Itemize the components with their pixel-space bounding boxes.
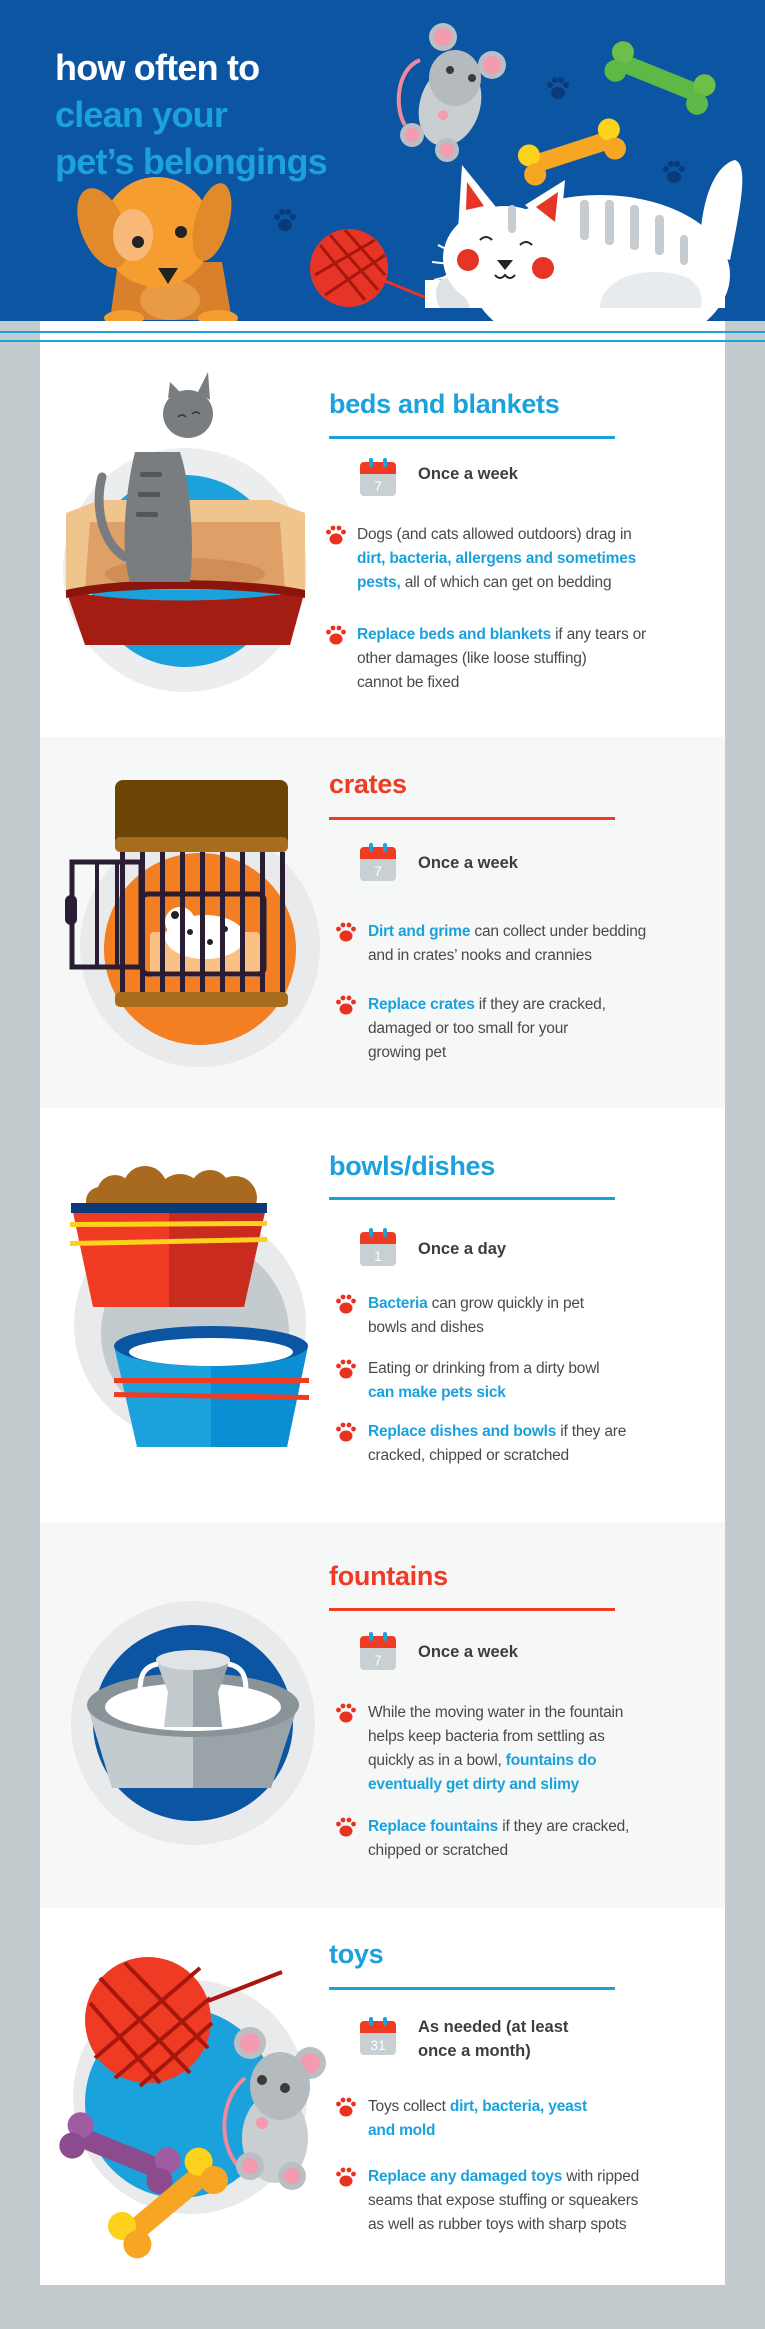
icon: paw prints — [274, 77, 685, 231]
icon: calendar 1 — [360, 1228, 396, 1266]
bullet: replace crates: growing pet — [368, 1044, 446, 1061]
bullet: bacteria — [336, 1294, 584, 1336]
illustration: fountain — [71, 1601, 315, 1845]
frequency text — [418, 2018, 568, 2060]
bullet: dirt — [326, 526, 636, 591]
panel: crates — [40, 737, 725, 1108]
frequency text: Once a week — [418, 1643, 518, 1661]
frequency text: Once a week — [418, 465, 518, 483]
bullet: replace fountains: Replace fountains if they are cracked, — [368, 1818, 629, 1835]
bullet: replace toys: seams that expose stuffing or squeakers — [368, 2192, 638, 2209]
bullet: moving water: While the moving water in the fountain — [368, 1704, 623, 1721]
bullet: replace fountains: chipped or scratched — [368, 1842, 508, 1859]
bullet: replace: other damages (like loose stuffing) — [357, 650, 587, 667]
bullet: replace bowls — [336, 1422, 626, 1464]
bullet: bacteria: Bacteria can grow quickly in pet — [368, 1295, 584, 1312]
bullet: replace crates — [336, 996, 606, 1061]
title: pet’s belongings — [55, 141, 327, 182]
bullet: toys collect: Toys collect dirt, bacteria, yeast — [368, 2098, 587, 2115]
bullet: replace toys: as well as rubber toys with sharp spots — [368, 2216, 626, 2233]
bullet: replace toys — [336, 2168, 639, 2233]
bullet: replace bowls: cracked, chipped or scratched — [368, 1447, 569, 1464]
bullet: replace crates: damaged or too small for your — [368, 1020, 568, 1037]
illustration: crate with dalmatian — [65, 780, 320, 1067]
icon: toy mouse — [399, 23, 506, 162]
heading: crates: crates — [329, 769, 407, 799]
frequency text: Once a day — [418, 1240, 506, 1258]
frequency text: Once a week — [418, 854, 518, 872]
bullet: dirty bowl — [336, 1360, 599, 1401]
icon: calendar 7: 7 — [374, 478, 382, 494]
bullet: moving water — [336, 1704, 623, 1793]
header banner — [0, 0, 765, 321]
icon: calendar 7 — [360, 458, 396, 496]
icon: yellow bone — [515, 116, 629, 188]
panel: beds and blankets — [40, 342, 725, 737]
bullet: dirty bowl: can make pets sick — [368, 1384, 506, 1401]
icon: yarn ball — [310, 229, 432, 307]
bullet: dirt: pests, all of which can get on bedding — [357, 574, 611, 591]
illustration: bowls — [70, 1166, 309, 1447]
bullet: replace fountains — [336, 1818, 629, 1859]
icon: calendar 7 — [360, 1632, 396, 1670]
bullet: dirt and grime: Dirt and grime can collect under bedding — [368, 923, 646, 940]
frequency text: As needed (at least — [418, 2018, 568, 2036]
header stripes — [0, 321, 765, 342]
bullet: moving water: eventually get dirty and slimy — [368, 1776, 579, 1793]
panel: fountains — [40, 1522, 725, 1908]
bullet: dirt and grime — [336, 922, 646, 964]
bullet: bacteria: bowls and dishes — [368, 1319, 484, 1336]
panel: bowls/dishes — [40, 1108, 725, 1522]
bullet: replace: Replace beds and blankets if any tears or — [357, 626, 646, 643]
icon: calendar 7: 7 — [374, 863, 382, 879]
bullet: moving water: quickly as in a bowl, fountains do — [368, 1752, 596, 1769]
frequency text: once a month) — [418, 2042, 531, 2060]
icon: white cat — [425, 160, 742, 355]
illustration: toys — [59, 1957, 326, 2258]
bullet: toys collect — [336, 2098, 587, 2139]
bullet: replace: cannot be fixed — [357, 674, 459, 691]
icon: green bone — [601, 38, 719, 118]
title: clean your — [55, 94, 227, 135]
bullet: dirt: Dogs (and cats allowed outdoors) drag in — [357, 526, 632, 543]
bullet: toys collect: and mold — [368, 2122, 435, 2139]
bullet: dirt: dirt, bacteria, allergens and sometimes — [357, 550, 636, 567]
bullet: replace crates: Replace crates if they are cracked, — [368, 996, 606, 1013]
panel: toys — [40, 1908, 725, 2285]
title — [55, 47, 327, 182]
icon: calendar 31: 31 — [370, 2037, 386, 2053]
heading: beds and blankets: beds and blankets — [329, 389, 559, 419]
bullet: dirty bowl: Eating or drinking from a dirty bowl — [368, 1360, 599, 1377]
icon: calendar 7: 7 — [374, 1652, 382, 1668]
title: how often to — [55, 47, 259, 88]
bullet: dirt and grime: and in crates’ nooks and crannies — [368, 947, 592, 964]
bullet: moving water: helps keep bacteria from settling as — [368, 1728, 605, 1745]
icon: calendar 1: 1 — [374, 1248, 382, 1264]
bullet: replace — [326, 626, 646, 691]
heading: toys: toys — [329, 1939, 383, 1969]
heading: fountains: fountains — [329, 1561, 448, 1591]
icon: calendar 31 — [360, 2017, 396, 2055]
bullet: replace bowls: Replace dishes and bowls if they are — [368, 1423, 626, 1440]
icon: dog — [67, 177, 239, 326]
illustration: cat in bed — [63, 372, 307, 692]
icon: calendar 7 — [360, 843, 396, 881]
bullet: replace toys: Replace any damaged toys with ripped — [368, 2168, 639, 2185]
heading: bowls/dishes: bowls/dishes — [329, 1151, 495, 1181]
